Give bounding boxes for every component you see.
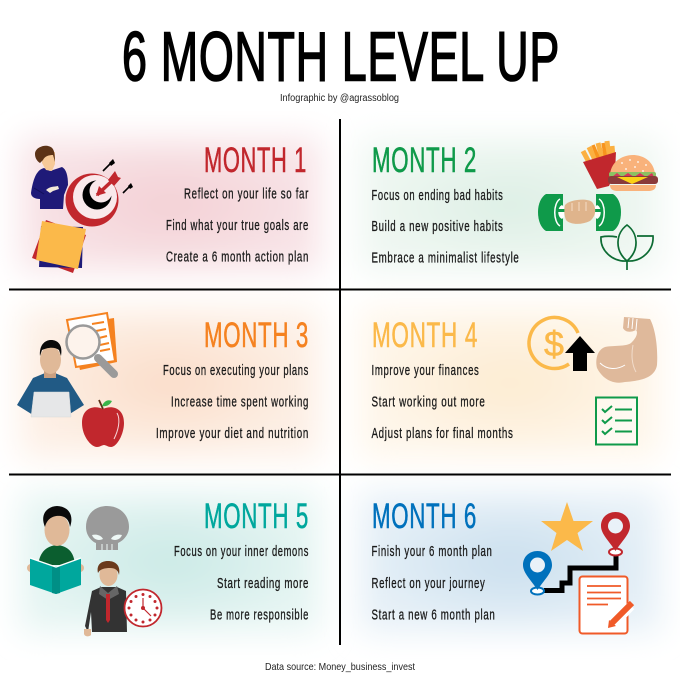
panel: month 5 [20, 492, 320, 636]
text: month 5 actions: Be more responsible [210, 608, 309, 624]
text: month 5 actions: Start reading more [217, 576, 309, 592]
data source: Data source: Money_business_invest [265, 661, 415, 673]
text: month 2 actions: Build a new positive habits [372, 219, 504, 235]
icon: flexed bicep [596, 317, 657, 383]
text: month 6 actions: Finish your 6 month plan [372, 544, 492, 560]
heading: month 1: MONTH 1 [204, 141, 307, 180]
text: month 1 actions: Create a 6 month action plan [166, 250, 309, 266]
panel background [360, 492, 660, 632]
text: month 3 actions: Increase time spent working [171, 394, 309, 410]
text: month 6 actions: Reflect on your journey [372, 576, 486, 592]
icon: skull [86, 506, 129, 550]
subtitle: Infographic by @agrassoblog [280, 93, 399, 104]
heading: month 2: MONTH 2 [372, 141, 477, 180]
text: month 6 actions [372, 544, 496, 624]
grid dividers [9, 119, 671, 645]
icon: businessman [84, 561, 127, 636]
icon: document with pencil [580, 576, 632, 634]
panel background [360, 308, 660, 458]
text: month 2 actions: Focus on ending bad habits [372, 188, 504, 204]
heading: month 3: MONTH 3 [204, 316, 309, 355]
text: month 6 actions: Start a new 6 month plan [372, 608, 496, 624]
text: month 1 actions: Find what your true goals are [166, 218, 309, 234]
panel: month 1 [20, 138, 320, 273]
panel background [20, 308, 320, 458]
panel background [360, 138, 660, 272]
icon: target with arrows [66, 159, 133, 226]
panel: month 2 [360, 138, 660, 272]
heading: month 4: MONTH 4 [372, 316, 478, 355]
icon: thinking man [31, 146, 68, 209]
text: month 2 actions: Embrace a minimalist lifestyle [372, 250, 520, 266]
icon: documents [67, 313, 117, 370]
icon: fries [583, 141, 616, 189]
icon: lotus leaves [601, 225, 653, 270]
text: month 3 actions: Focus on executing your plans [163, 363, 309, 379]
text: month 2 actions [372, 188, 520, 266]
icon: route path [544, 555, 616, 590]
icon: apple [82, 400, 124, 447]
panel background [20, 138, 320, 272]
icon: burger [608, 155, 658, 191]
icon: dollar coin: $ [544, 325, 564, 364]
icon: man reading a book [27, 506, 84, 594]
text: month 1 actions [166, 186, 309, 266]
icon: clock [124, 590, 162, 626]
icon: up arrow [565, 336, 595, 371]
heading: month 5: MONTH 5 [204, 497, 309, 536]
text: month 4 actions: Improve your finances [372, 363, 480, 379]
icon: red map pin [601, 512, 630, 556]
icon: dumbbell with fist [538, 194, 621, 231]
icon: star [541, 502, 593, 551]
text: month 1 actions: Reflect on your life so far [184, 186, 309, 202]
text: month 3 actions [156, 363, 309, 442]
panel: month 6 [360, 492, 660, 634]
text: month 4 actions: Adjust plans for final months [372, 426, 514, 442]
text: month 4 actions: Start working out more [372, 394, 486, 410]
icon: sticky notes [32, 220, 86, 273]
icon: checklist [596, 398, 637, 444]
text: month 3 actions: Improve your diet and nutrition [156, 426, 309, 442]
text: month 5 actions: Focus on your inner demons [174, 544, 309, 560]
panel background [20, 492, 320, 632]
icon: magnifying glass [66, 326, 114, 374]
icon: blue map pin [523, 551, 552, 594]
icon: dollar coin [529, 317, 578, 368]
heading: month 6: MONTH 6 [372, 497, 477, 536]
text: month 5 actions [174, 544, 309, 624]
text: month 4 actions [372, 363, 514, 442]
panel: month 4 [360, 308, 660, 458]
icon: man at laptop [17, 340, 84, 417]
panel: month 3 [17, 308, 320, 458]
